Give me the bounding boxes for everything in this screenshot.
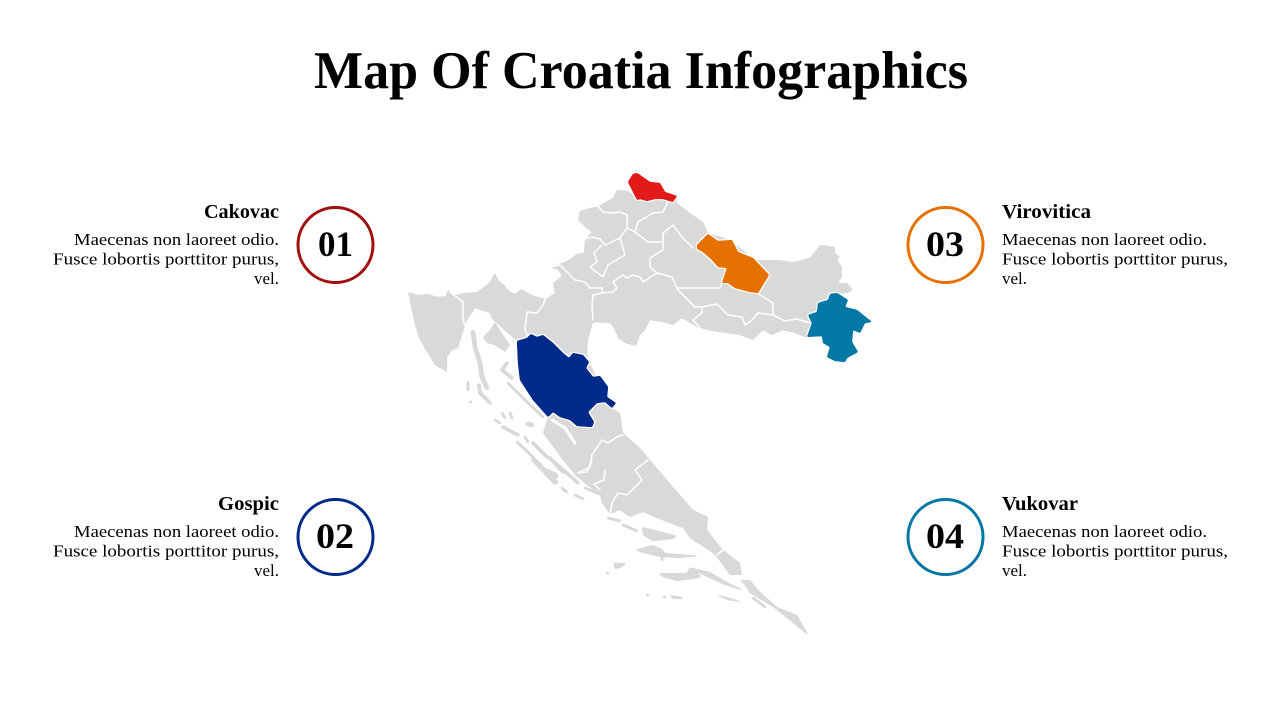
heading: Cakovac: Cakovac: [204, 201, 279, 223]
number badge 03: 03: [926, 224, 964, 264]
map: base silhouette: [408, 190, 853, 575]
number badge 02: [298, 500, 373, 574]
text block: Cakovac description: Fusce lobortis porttitor purus,: [53, 250, 279, 268]
number badge 01: 01: [318, 224, 353, 264]
map region: Cakovac (red): [628, 173, 677, 202]
text block: Virovitica description: [1002, 230, 1228, 288]
text block: Gospic description: vel.: [254, 561, 279, 580]
map region: Gospic (blue): [517, 334, 616, 427]
map: county borders: [450, 202, 810, 555]
map region: Virovitica (orange): [697, 234, 769, 293]
panel: 02 Gospic: [53, 493, 373, 580]
map region: Vukovar (teal): [807, 293, 872, 362]
number badge 03: [908, 208, 983, 282]
text block: Gospic description: Fusce lobortis porttitor purus,: [53, 542, 279, 560]
map: islands: [468, 322, 765, 607]
heading: Vukovar: Vukovar: [1002, 493, 1078, 515]
number badge 01: [298, 208, 373, 282]
text block: Cakovac description: Maecenas non laoreet odio.: [74, 230, 279, 249]
number badge 04: [908, 500, 983, 574]
panel: 04 Vukovar: [908, 493, 1228, 580]
heading: Gospic: Gospic: [218, 493, 279, 515]
text block: Cakovac description: vel.: [254, 269, 279, 288]
heading: Virovitica: Virovitica: [1002, 201, 1091, 223]
text block: Virovitica description: Fusce lobortis porttitor purus,: [1002, 250, 1228, 268]
number badge 04: 04: [926, 516, 964, 556]
text block: Vukovar description: vel.: [1002, 561, 1027, 580]
text block: Gospic description: [53, 522, 279, 580]
number badge 02: 02: [316, 516, 354, 556]
title: Map Of Croatia Infographics: [314, 42, 968, 100]
text block: Vukovar description: Fusce lobortis porttitor purus,: [1002, 542, 1228, 560]
text block: Virovitica description: vel.: [1002, 269, 1027, 288]
map of Croatia: [408, 173, 872, 636]
text block: Cakovac description: [53, 230, 279, 288]
map: southern coastal strip: [740, 580, 809, 636]
panel: 03 Virovitica: [908, 201, 1228, 288]
text block: Vukovar description: Maecenas non laoreet odio.: [1002, 522, 1207, 541]
text block: Vukovar description: [1002, 522, 1228, 580]
panel: 01 Cakovac: [53, 201, 373, 288]
text block: Virovitica description: Maecenas non laoreet odio.: [1002, 230, 1207, 249]
text block: Gospic description: Maecenas non laoreet odio.: [74, 522, 279, 541]
